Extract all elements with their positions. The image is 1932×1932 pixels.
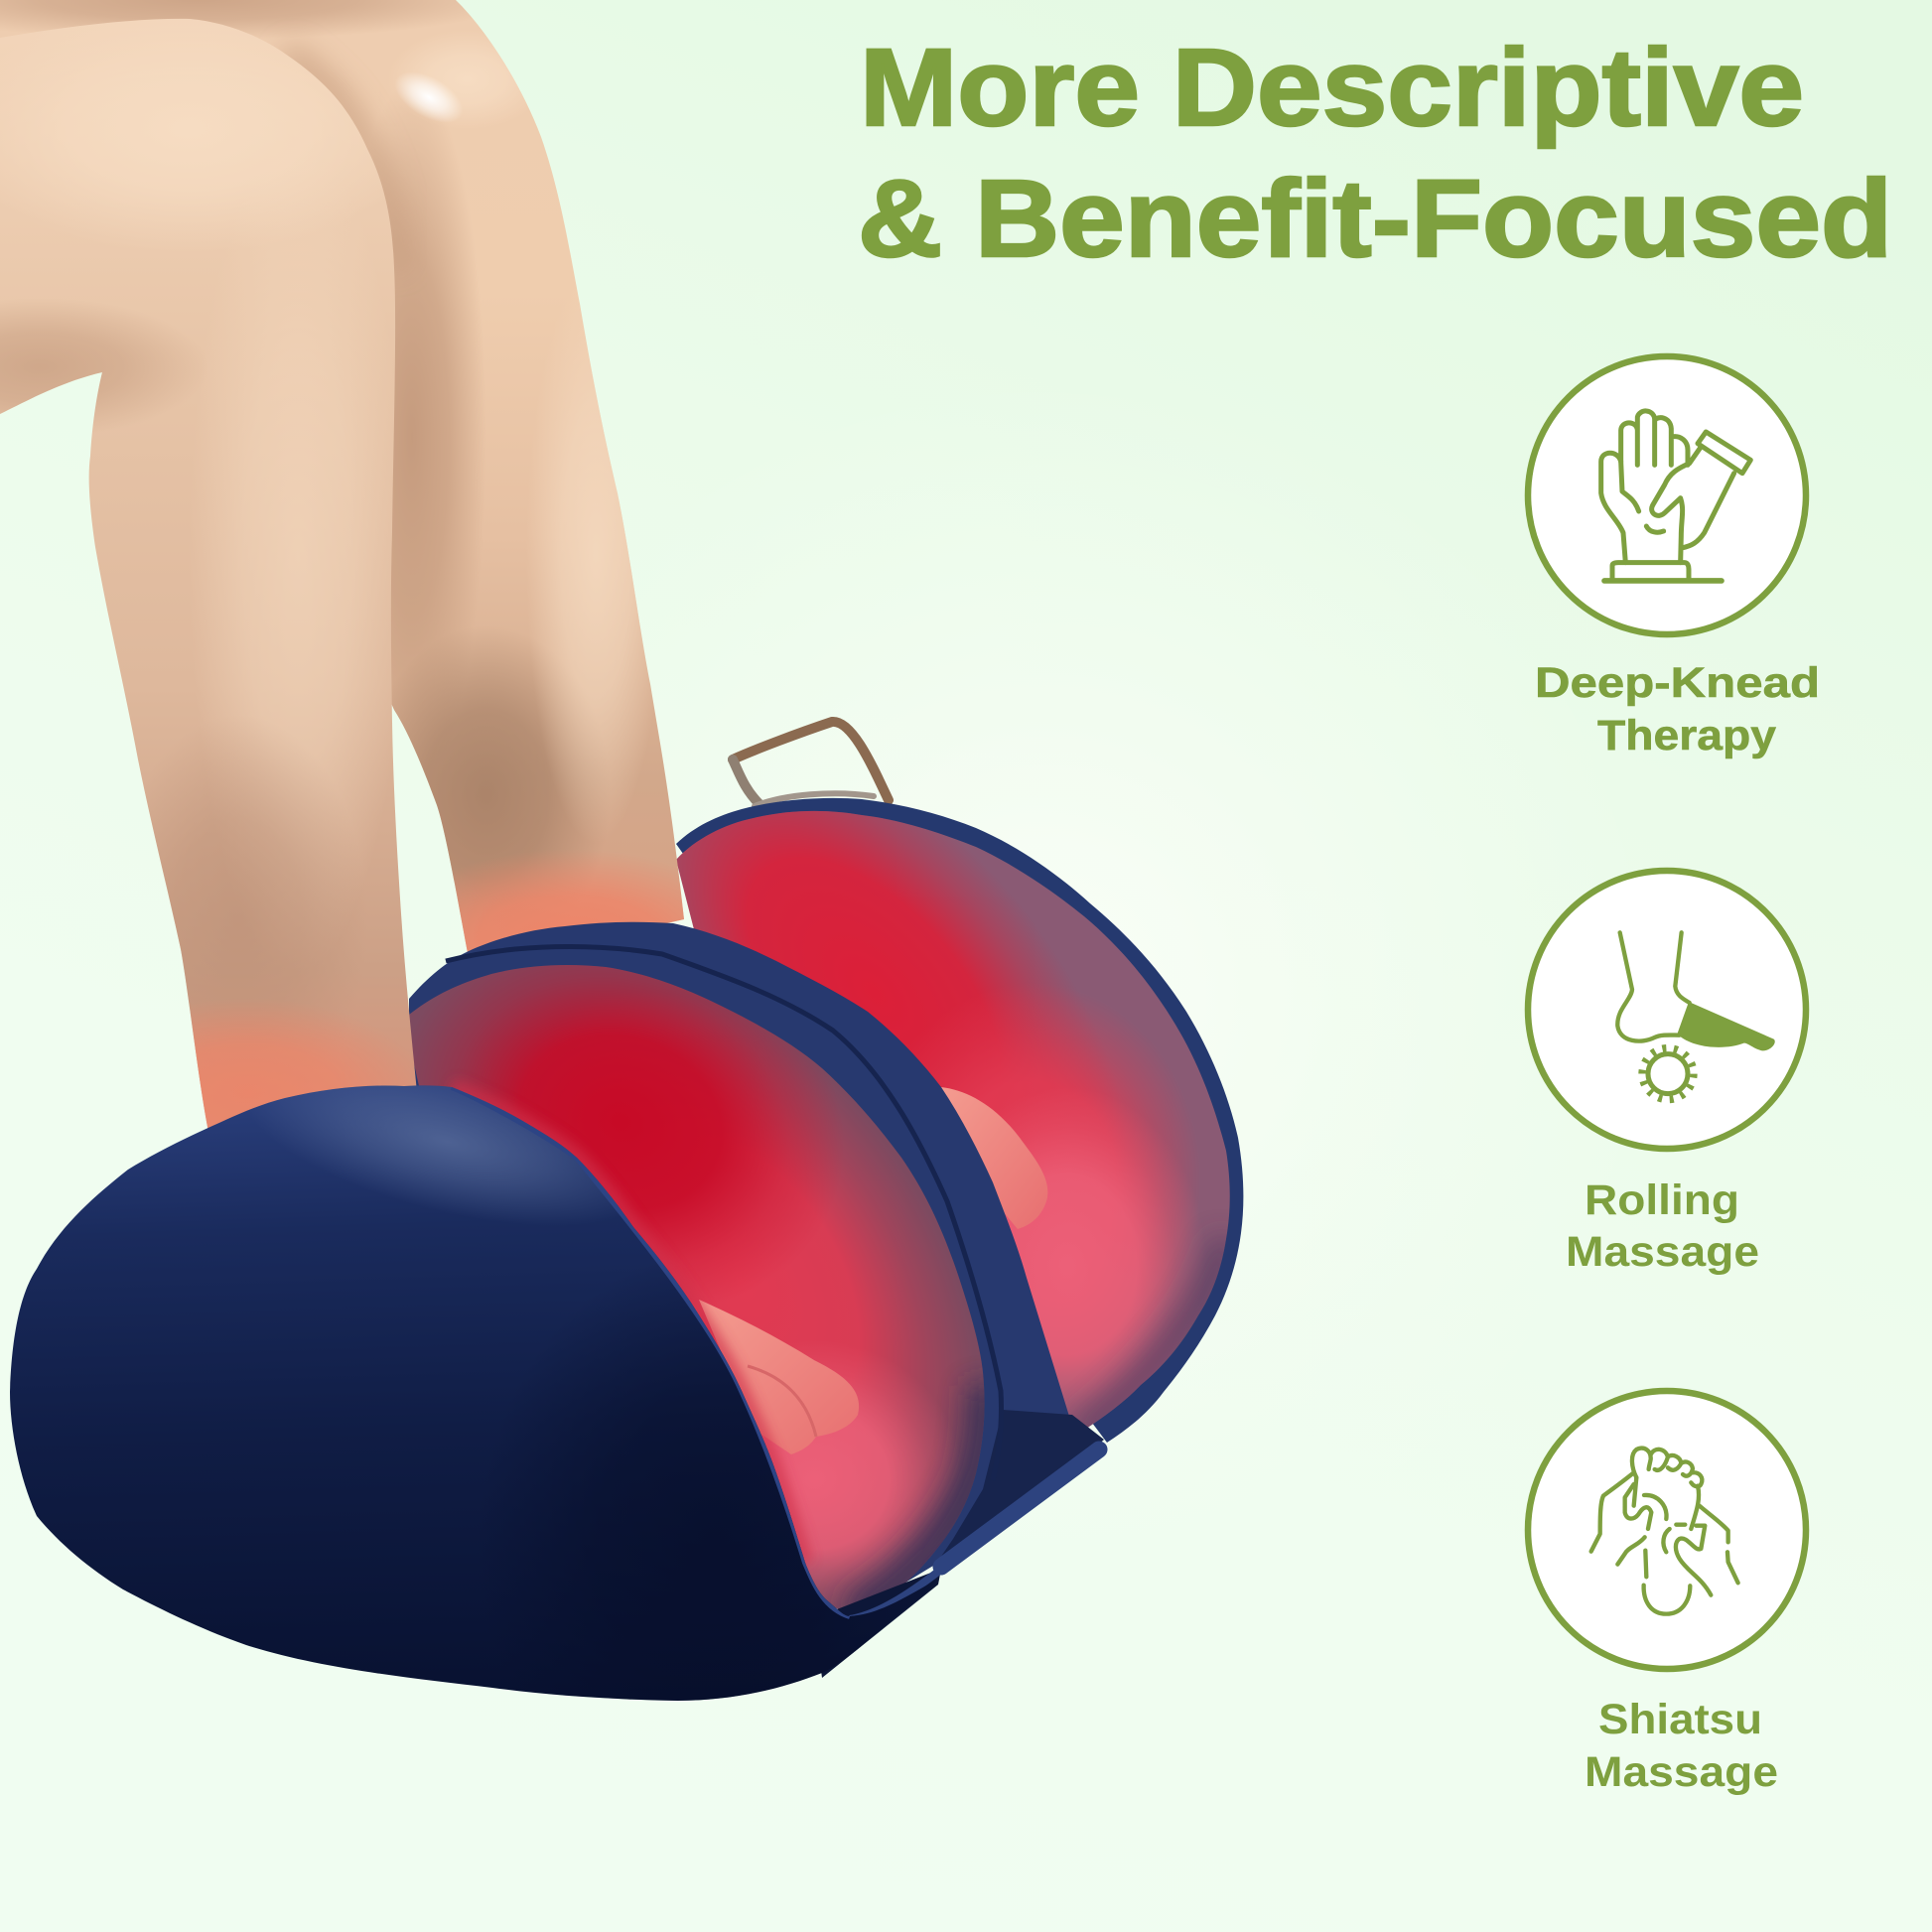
label: Shiatsu xyxy=(1598,1696,1762,1743)
middle massager band and heated panel xyxy=(409,921,1108,1678)
label: Therapy xyxy=(1597,712,1776,759)
label: Deep-Knead xyxy=(1535,659,1820,707)
handle xyxy=(733,722,889,806)
title: & Benefit-Focused xyxy=(858,158,1892,280)
icon: foot on roller in circle xyxy=(1528,871,1806,1149)
back massager shell xyxy=(676,798,1243,1443)
feature: deep-knead therapy xyxy=(1528,356,1820,759)
product photo: legs in foot massager xyxy=(0,0,1243,1847)
icon: hand and tube in circle xyxy=(1528,356,1806,634)
label xyxy=(1566,1176,1759,1276)
icon: hands pressing foot in circle xyxy=(1528,1391,1806,1669)
back heated red panel xyxy=(677,810,1227,1428)
title xyxy=(858,27,1892,280)
label: Massage xyxy=(1566,1228,1759,1276)
title: More Descriptive xyxy=(860,27,1804,149)
feature: shiatsu massage xyxy=(1528,1391,1806,1796)
label xyxy=(1585,1696,1778,1796)
feature: rolling massage xyxy=(1528,871,1806,1276)
back leg xyxy=(0,0,684,952)
base plate xyxy=(814,1449,1099,1678)
label: Massage xyxy=(1585,1748,1778,1796)
label xyxy=(1535,659,1820,759)
label: Rolling xyxy=(1585,1176,1739,1224)
front massage node xyxy=(699,1300,859,1454)
front leg xyxy=(0,18,417,1128)
front massager shell xyxy=(10,1078,927,1701)
rear massage node xyxy=(941,1087,1047,1229)
